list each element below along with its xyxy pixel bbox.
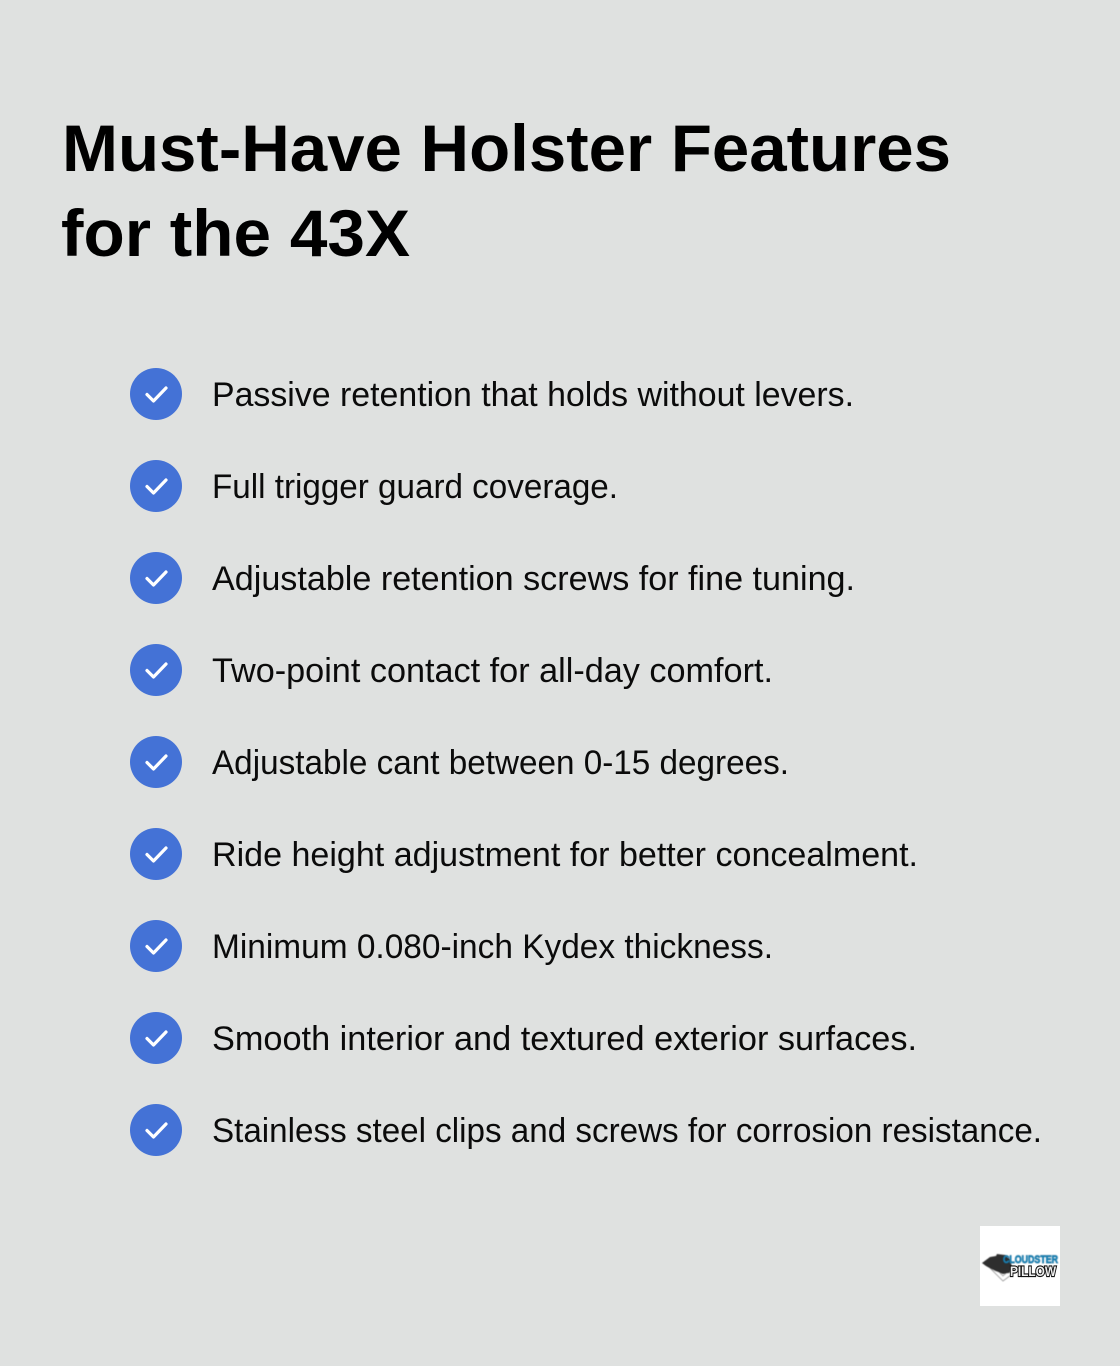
title: for the 43X — [61, 196, 410, 270]
item: retention screws — [130, 552, 855, 604]
item: retention screws: Adjustable retention screws for fine tuning. — [212, 560, 855, 598]
item: surfaces: Smooth interior and textured exterior surfaces. — [212, 1020, 917, 1058]
item: two-point contact: Two-point contact for all-day comfort. — [212, 652, 773, 690]
item: ride height: Ride height adjustment for better concealment. — [212, 836, 918, 874]
item: adjustable cant: Adjustable cant between 0-15 degrees. — [212, 744, 789, 782]
item: two-point contact — [130, 644, 773, 696]
item: passive retention: Passive retention that holds without levers. — [212, 376, 854, 414]
title — [61, 111, 951, 270]
item: passive retention — [130, 368, 854, 420]
logo: Cloudster Pillow: CLOUDSTER — [1003, 1254, 1058, 1266]
item: kydex thickness — [130, 920, 773, 972]
logo: Cloudster Pillow — [980, 1226, 1060, 1306]
checklist — [130, 368, 1042, 1156]
icon: pillow — [982, 1254, 1015, 1281]
logo: Cloudster Pillow: PILLOW — [1010, 1263, 1057, 1279]
item: stainless steel: Stainless steel clips and screws for corrosion resistance. — [212, 1112, 1042, 1150]
title: Must-Have Holster Features — [62, 111, 951, 185]
item: stainless steel — [130, 1104, 1042, 1156]
item: trigger guard — [130, 460, 618, 512]
item: surfaces — [130, 1012, 917, 1064]
item: ride height — [130, 828, 918, 880]
item: adjustable cant — [130, 736, 789, 788]
item: kydex thickness: Minimum 0.080-inch Kydex thickness. — [212, 928, 773, 966]
item: trigger guard: Full trigger guard coverage. — [212, 468, 618, 506]
